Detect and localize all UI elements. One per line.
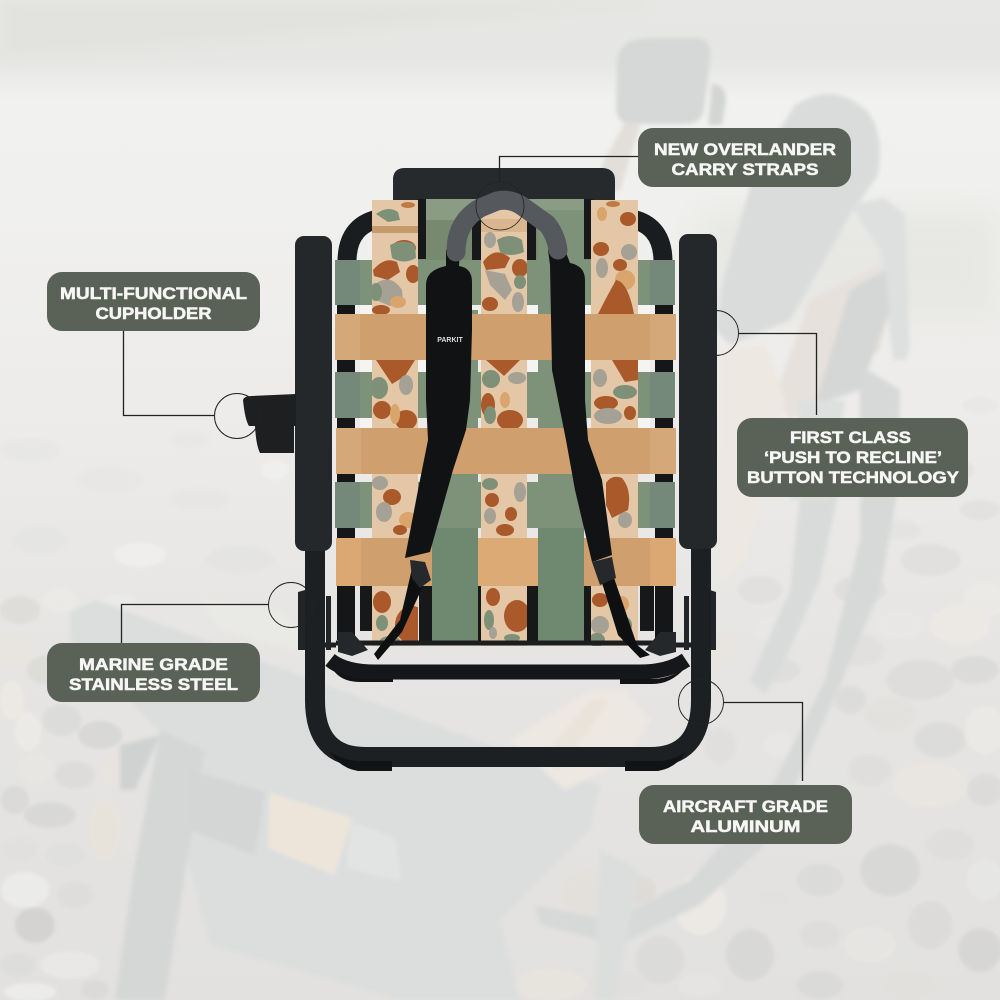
callout: push to recline button: BUTTON TECHNOLOGY [747,468,960,487]
callout: aircraft grade aluminum: AIRCRAFT GRADE [663,797,828,816]
shoulder strap right [548,250,612,562]
callout: new overlander carry straps [476,128,851,230]
lower hinge bar [298,643,716,645]
shoulder strap left [405,250,472,558]
hinge hardware [338,632,676,656]
left hinge bracket [298,590,331,650]
callout: aircraft grade aluminum: ALUMINUM [690,817,800,836]
camo strip middle [481,200,530,646]
right hinge bracket [684,590,716,650]
callout: marine grade stainless steel: MARINE GRADE [79,655,228,674]
buckles [410,557,616,588]
callout: marine grade stainless steel: STAINLESS STEEL [69,675,238,694]
callout: multi-functional cupholder: CUPHOLDER [96,304,212,323]
right armrest [679,234,717,549]
yoke handle [456,200,558,252]
tan webbing bands [335,314,676,586]
background: ghosted chair bottom left [70,600,650,1000]
callout: new overlander carry straps: CARRY STRAPS [672,160,818,179]
lower strap tail right [595,560,650,658]
callout: push to recline button: ‘PUSH TO RECLINE’ [764,448,942,467]
callout: push to recline button: FIRST CLASS [790,428,911,447]
backpack straps [374,200,650,660]
callout: push to recline button [716,310,968,497]
leg frame [315,545,701,757]
green back webbing [335,199,675,641]
lower strap tail left [374,560,428,660]
cupholder [243,394,296,453]
camo top fold ends [372,200,638,233]
camo strip left [372,200,418,646]
background: ghosted chair top right [535,38,910,1000]
callout: aircraft grade aluminum [639,680,852,844]
black vertical straps at top [360,199,654,641]
callout: marine grade stainless steel [47,582,314,702]
callout: new overlander carry straps: NEW OVERLANDER [654,140,836,159]
callout: multi-functional cupholder [47,272,260,438]
callout: multi-functional cupholder: MULTI-FUNCTIONAL [60,284,247,303]
left armrest [295,236,332,551]
seat cross tube [330,660,686,672]
back frame tube [347,218,663,270]
camo strip right [589,200,638,647]
foot caps [330,668,686,771]
inner black frame rails [346,260,664,640]
white gaps between bands [360,305,650,428]
logo label: PARKIT [437,337,463,344]
headrest pillow [393,168,615,210]
chair [243,168,717,771]
